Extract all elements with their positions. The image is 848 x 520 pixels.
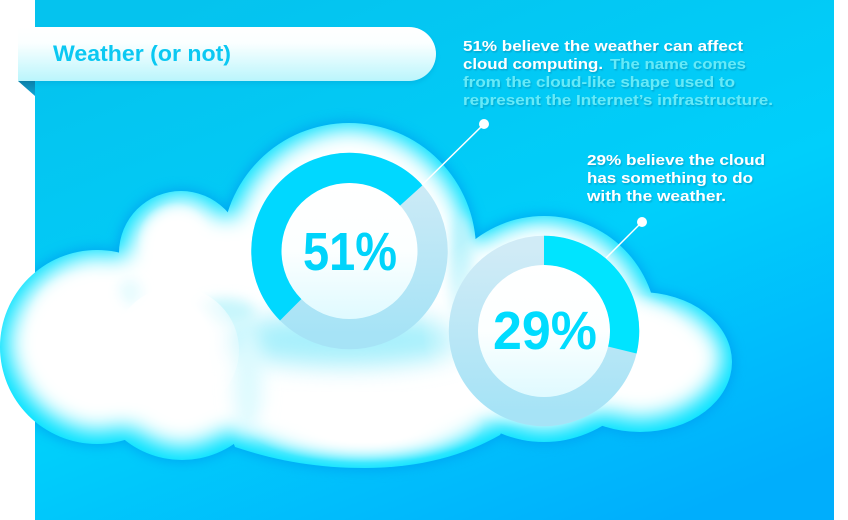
ring value arc [544,250,624,350]
value: 29% [493,301,597,361]
caption: 51%: The name comes [610,56,746,73]
heading text: Weather (or not) [53,41,231,66]
caption: 29% [586,152,765,205]
caption: 51%: from the cloud-like shape used to [463,74,735,91]
ring track [464,250,624,412]
caption: 51%: cloud computing. [463,56,603,73]
hub [478,265,610,397]
caption: 29%: 29% believe the cloud [587,152,765,169]
caption: 51% [463,38,773,109]
highlight: small puff [140,204,190,241]
ring value arc [267,168,411,310]
caption: 29%: with the weather. [586,188,726,205]
highlight: right puff [636,298,672,316]
caption: 29%: has something to do [587,170,753,187]
leader line: 29% [606,217,647,258]
ribbon fold [18,81,35,96]
donut: 51% [266,168,432,334]
hub [282,183,418,319]
halo: right ring [429,226,530,424]
cloud silhouette with cyan rim [0,123,732,468]
cloud interior shading [118,204,672,462]
highlight: inner left puff [136,296,239,364]
cloud [0,121,734,470]
ribbon heading [18,27,436,96]
caption: 51%: 51% believe the weather can affect [463,38,743,55]
ring track [266,168,432,334]
highlight: far left puff [25,270,135,380]
donut: 29% [464,250,624,412]
ribbon shadow [35,30,436,84]
caption: 51%: represent the Internet’s infrastructure. [463,92,773,109]
value: 51% [303,222,397,282]
leader line: 51% [422,119,489,185]
highlight: bottom centre [256,422,480,462]
ribbon bar [18,27,436,81]
cloud shadow [0,121,734,470]
